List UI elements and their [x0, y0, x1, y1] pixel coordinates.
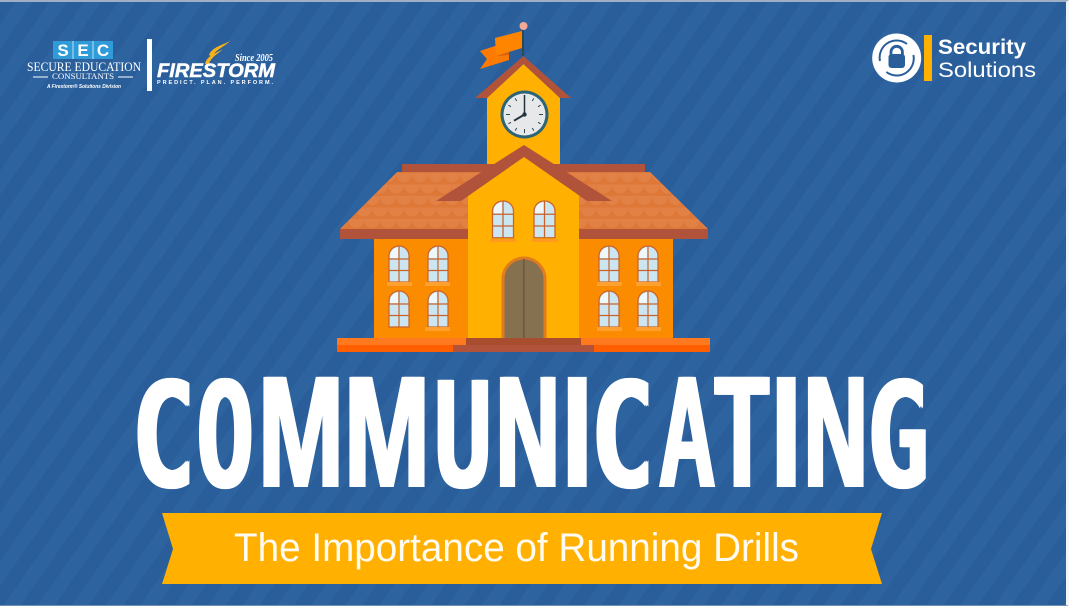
title: M [258, 342, 344, 521]
logo: Firestorm: PREDICT. PLAN. PERFORM. [157, 80, 273, 86]
title: I [559, 342, 595, 521]
icon: padlock badge [872, 34, 921, 82]
base and steps [337, 338, 710, 352]
side wings [374, 239, 673, 338]
title: N [496, 342, 560, 521]
accent bar [924, 35, 932, 81]
title: C [131, 351, 196, 522]
upper centre windows [490, 201, 558, 242]
gable roof [436, 145, 612, 201]
logo: Firestorm [157, 41, 276, 86]
clock tower [475, 56, 571, 170]
title: T [715, 342, 769, 521]
subtitle ribbon: The Importance of Running Drills [234, 526, 799, 570]
logo: Secure Education Consultants: E [77, 41, 89, 60]
main roof [340, 164, 708, 239]
logo: Secure Education Consultants: CONSULTANTS [52, 72, 114, 81]
clock [500, 90, 548, 138]
title: N [804, 342, 868, 521]
logo: Security Solutions [872, 34, 1036, 82]
title: M [344, 342, 430, 521]
logo: Secure Education Consultants: S [57, 41, 69, 60]
door [502, 256, 546, 338]
left wing windows [387, 246, 450, 331]
logo: Security Solutions: Solutions [938, 58, 1036, 82]
logo: Firestorm: FIRESTORM [157, 61, 276, 82]
flag [480, 22, 528, 69]
title: A [659, 342, 715, 521]
title [131, 342, 929, 522]
logo: Secure Education Consultants [27, 41, 142, 90]
school building illustration [337, 22, 710, 352]
title: U [434, 351, 492, 522]
title: I [768, 342, 804, 521]
central gable block [468, 157, 579, 338]
logo: Security Solutions: Security [938, 35, 1026, 59]
right wing windows [597, 246, 661, 331]
logo: Firestorm: Since 2005 [235, 53, 273, 64]
title: C [590, 351, 655, 522]
subtitle ribbon [162, 513, 882, 584]
title: O [196, 351, 254, 522]
logo: Secure Education Consultants: A Firestorm® Solutions Division [46, 83, 121, 90]
title: G [867, 351, 929, 522]
divider between logos [147, 39, 152, 91]
logo: Secure Education Consultants: C [97, 41, 109, 60]
logo: Secure Education Consultants: SECURE EDUCATION [27, 59, 142, 74]
